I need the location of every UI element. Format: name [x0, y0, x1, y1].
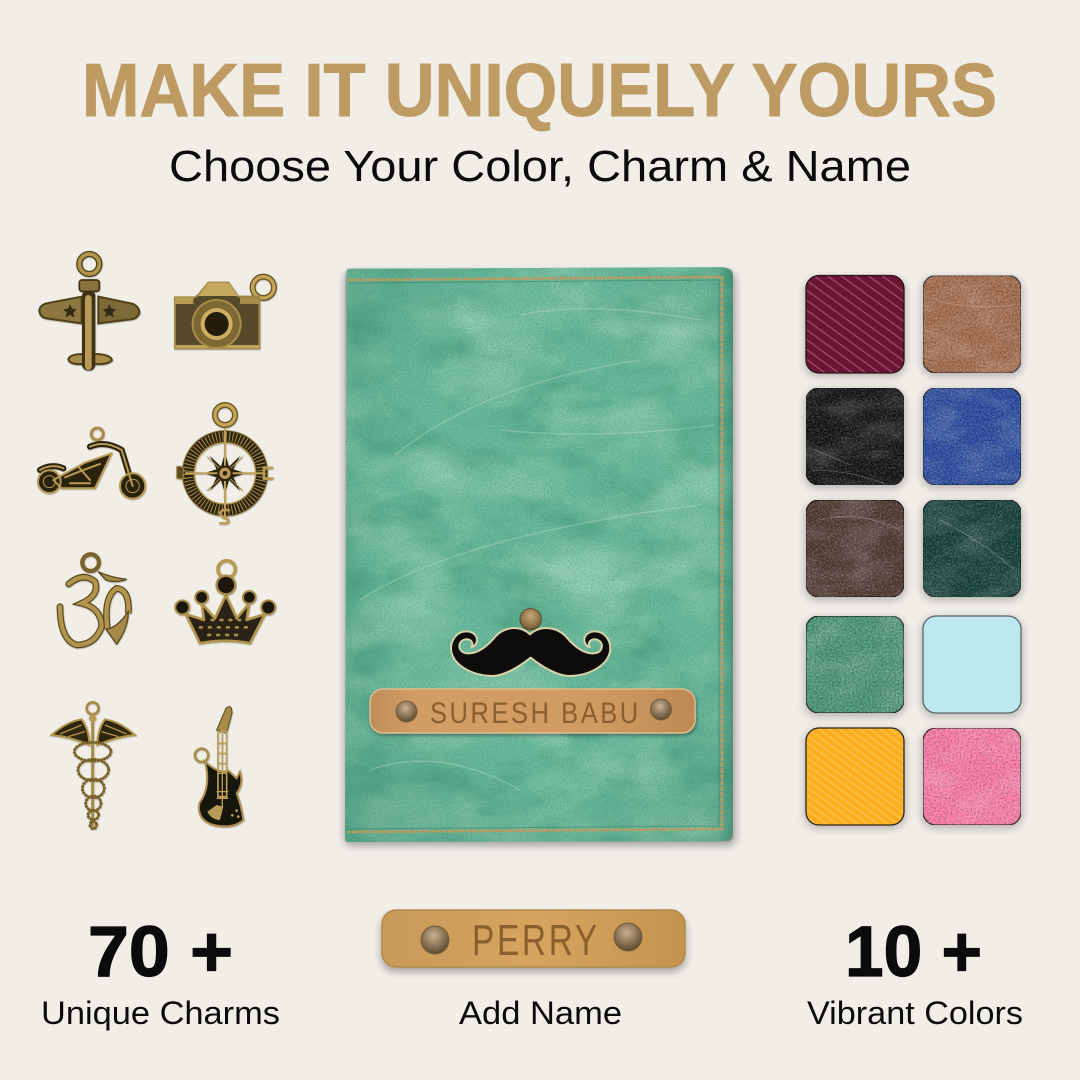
- caption: Unique Charms: [41, 995, 280, 1031]
- spine shading: [716, 268, 733, 841]
- plate body: [370, 689, 695, 733]
- swatch: sea green: [806, 616, 904, 713]
- charm: guitar: [195, 707, 243, 826]
- cover shadow: [344, 272, 736, 846]
- swatch: pink: [923, 728, 1021, 825]
- charm: crown: [175, 561, 275, 643]
- swatch shadows: [804, 277, 1023, 829]
- caption: Vibrant Colors: [807, 995, 1023, 1031]
- add name feature: [381, 910, 686, 1031]
- cover leather: [345, 267, 733, 842]
- plate text: SURESH BABU: [430, 696, 641, 729]
- plate rivet left: [396, 701, 417, 722]
- plate body: [382, 910, 685, 967]
- stat: colours count: [807, 913, 1023, 1031]
- plate rivet right: [650, 699, 672, 720]
- swatch: blue: [923, 388, 1021, 485]
- rivet right: [614, 923, 642, 951]
- plate text: PERRY: [472, 917, 600, 965]
- edge vignette: [345, 268, 733, 842]
- passport cover: [344, 267, 736, 846]
- caption: Add Name: [459, 995, 622, 1031]
- stitching shadow: [347, 280, 719, 829]
- swatch: sky blue: [923, 616, 1021, 713]
- charm stud: [520, 609, 541, 630]
- number: 70 +: [88, 913, 233, 992]
- charm: compass: [177, 405, 273, 523]
- swatch: tan: [923, 276, 1021, 373]
- subtitle: Choose Your Color, Charm & Name: [169, 142, 911, 191]
- plate shadow: [381, 915, 686, 972]
- charm: airplane: [39, 254, 139, 371]
- stat: charms count: [41, 913, 280, 1031]
- moustache shape: [451, 628, 610, 676]
- colour swatches: [804, 276, 1023, 829]
- swatch scratches: [812, 300, 1015, 570]
- swatch: forest green: [923, 500, 1021, 597]
- charm: motorcycle: [38, 428, 145, 499]
- charms panel: [38, 254, 275, 829]
- scuff marks: [360, 309, 715, 790]
- swatch: maroon: [806, 276, 904, 373]
- swatch: black: [806, 388, 904, 485]
- swatch: brown: [806, 500, 904, 597]
- title: MAKE IT UNIQUELY YOURS: [82, 48, 997, 132]
- charm: caduceus: [52, 702, 135, 829]
- moustache charm: [451, 609, 610, 676]
- number: 10 +: [845, 913, 982, 992]
- rivet left: [421, 926, 449, 954]
- charm: camera: [175, 277, 274, 348]
- name plate: Suresh Babu: [370, 689, 695, 733]
- swatch: yellow: [806, 728, 904, 825]
- charm: om: [60, 554, 129, 645]
- stitching: [347, 277, 722, 832]
